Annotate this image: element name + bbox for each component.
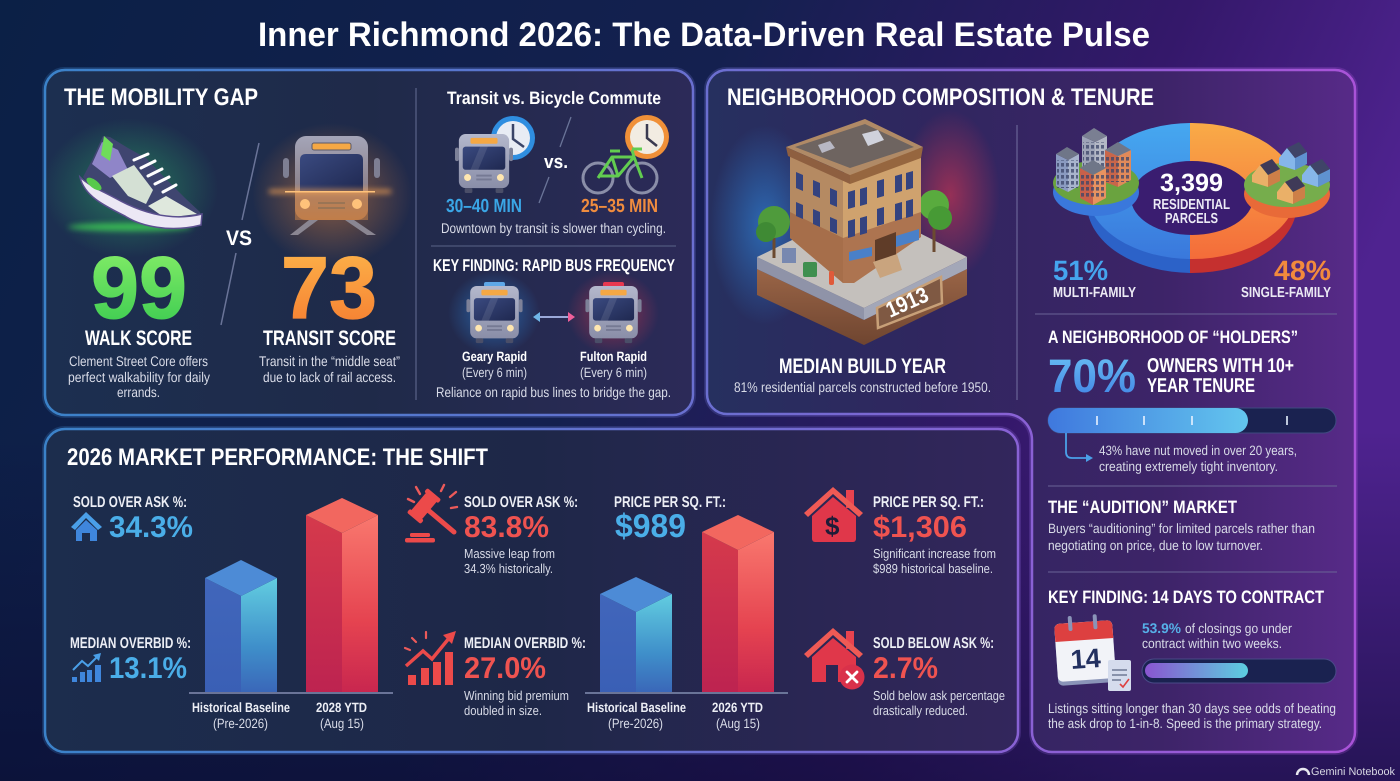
chart: parcel donut: [1053, 123, 1330, 273]
chart: sold over ask bars: (Aug 15): [320, 716, 364, 731]
stat: 2026 sold below ask: Sold below ask percentage: [873, 688, 1005, 703]
icon: isometric 1913 building: [710, 110, 1000, 345]
panel: the mobility gap: [42, 70, 693, 415]
metric: 70 percent owners: YEAR TENURE: [1147, 375, 1255, 397]
stat: baseline sold over ask: SOLD OVER ASK %:: [73, 494, 187, 511]
metric: walk score: Clement Street Core offers: [69, 353, 208, 369]
bar: 2026 ytd: [306, 498, 378, 693]
icon: blue house: [71, 512, 102, 541]
icon: geary bus: [448, 271, 540, 355]
icon: house with dollar: $: [825, 511, 840, 541]
title: Inner Richmond 2026: The Data-Driven Real Estate Pulse: [258, 16, 1150, 54]
label: median build year: MEDIAN BUILD YEAR: [779, 355, 946, 378]
metric: single-family: 48%: [1274, 255, 1331, 286]
stat: 2026 price per square foot: Significant increase from: [873, 546, 996, 561]
heading: neighborhood composition: NEIGHBORHOOD COMPOSITION & TENURE: [727, 84, 1154, 111]
metric: walk score: 99: [91, 238, 187, 337]
chart: price per square foot bars: Historical Baseline: [587, 700, 686, 715]
bar: historical baseline: [205, 560, 277, 693]
icon: fulton bus: [567, 271, 659, 355]
caption: reliance: Reliance on rapid bus lines to bridge the gap.: [436, 384, 671, 400]
caption: downtown: Downtown by transit is slower than cycling.: [441, 220, 666, 236]
metric: multi-family: MULTI-FAMILY: [1053, 285, 1136, 301]
vs divider: VS: [226, 227, 252, 250]
chart: price per square foot bars: (Aug 15): [716, 716, 760, 731]
stat: baseline median overbid: [70, 635, 191, 685]
stat: 2026 price per square foot: $1,306: [873, 511, 967, 544]
arrow: elbow to note: [1066, 433, 1093, 462]
stat: 2026 price per square foot: $989 historical baseline.: [873, 561, 993, 576]
metric: 70 percent owners: [1048, 349, 1294, 402]
icon: apartment towers on island: [1053, 128, 1139, 216]
icon: bicycle with orange clock: [583, 115, 669, 193]
vs divider: [221, 143, 259, 325]
bar: 2026 ytd: [702, 515, 774, 693]
stat: 2026 sold below ask: drastically reduced.: [873, 703, 968, 718]
label: fulton rapid: [580, 349, 647, 380]
metric: single-family: [1241, 255, 1331, 301]
label: fulton rapid: Fulton Rapid: [580, 349, 647, 364]
label: 30-40 min: 30–40 MIN: [446, 196, 522, 217]
chart: sold over ask bars: [189, 498, 393, 731]
icon: house with x badge: [804, 628, 864, 690]
metric: transit score: Transit in the “middle seat”: [259, 353, 400, 369]
stat: 2026 median overbid: [405, 631, 586, 718]
stat: 2026 median overbid: 27.0%: [464, 652, 546, 685]
stat: 2026 price per square foot: [804, 487, 996, 576]
label: median build year: [734, 355, 991, 395]
icon: blue trend chart: [72, 653, 101, 682]
chart: sold over ask bars: (Pre-2026): [213, 716, 268, 731]
vs small divider: [539, 117, 571, 203]
heading: the mobility gap: THE MOBILITY GAP: [64, 84, 258, 111]
note: not moved: creating extremely tight inventory.: [1099, 459, 1278, 474]
metric: multi-family: [1053, 255, 1136, 301]
stat: 2026 sold over ask: 83.8%: [464, 511, 549, 544]
stat: 2026 median overbid: MEDIAN OVERBID %:: [464, 635, 586, 652]
stat: 2026 median overbid: doubled in size.: [464, 703, 542, 718]
label: median build year: 81% residential parcels constructed before 1950.: [734, 379, 991, 395]
icon: train with orange glow: [252, 123, 412, 267]
chart: price per square foot bars: (Pre-2026): [608, 716, 663, 731]
metric: 70 percent owners: OWNERS WITH 10+: [1147, 355, 1294, 377]
metric: transit score: 73: [281, 238, 377, 337]
stat: baseline sold over ask: 34.3%: [109, 511, 193, 544]
metric: transit score: [259, 238, 400, 385]
heading: 14 days to contract: KEY FINDING: 14 DAYS TO CONTRACT: [1048, 587, 1324, 607]
metric: 70 percent owners: 70%: [1048, 349, 1136, 402]
panel: 2026 market performance: [45, 429, 1018, 752]
stat: 2026 sold over ask: Massive leap from: [464, 546, 555, 561]
metric: transit score: TRANSIT SCORE: [263, 327, 396, 350]
icon: red trend chart: [405, 631, 456, 685]
arrow: between buses: [533, 312, 575, 322]
metric: walk score: WALK SCORE: [85, 327, 192, 350]
note: listings sitting longer: Listings sitting longer than 30 days see odds of beating: [1048, 701, 1336, 716]
metric: walk score: [68, 238, 210, 400]
chart: sold over ask bars: 2028 YTD: [316, 700, 367, 715]
label: parcel total: [1153, 169, 1230, 227]
label: parcel total: 3,399: [1160, 169, 1223, 197]
stat: 2026 median overbid: Winning bid premium: [464, 688, 569, 703]
stat: 2026 sold below ask: 2.7%: [873, 652, 938, 685]
icon: bus small: [455, 134, 513, 193]
icon: calendar 14: [1054, 613, 1131, 691]
chart: price per square foot bars: PRICE PER SQ. FT.:: [614, 494, 726, 511]
label: geary rapid: (Every 6 min): [462, 365, 527, 380]
stat: baseline median overbid: 13.1%: [109, 652, 187, 685]
label: fulton rapid: (Every 6 min): [580, 365, 647, 380]
section: audition market: negotiating on price, due to low turnover.: [1048, 538, 1263, 553]
chart: sold over ask bars: Historical Baseline: [192, 700, 290, 715]
metric: transit score: due to lack of rail access.: [263, 369, 396, 385]
heading: transit vs bicycle: Transit vs. Bicycle Commute: [447, 88, 661, 108]
stat: 2026 sold below ask: SOLD BELOW ASK %:: [873, 635, 994, 652]
chart: price per square foot bars: [585, 494, 788, 731]
section: audition market: [1048, 497, 1315, 553]
section: audition market: THE “AUDITION” MARKET: [1048, 497, 1237, 517]
stat: 2026 sold over ask: SOLD OVER ASK %:: [464, 494, 578, 511]
metric: single-family: SINGLE-FAMILY: [1241, 285, 1331, 301]
heading: holders: A NEIGHBORHOOD OF “HOLDERS”: [1048, 327, 1298, 347]
chart: price per square foot bars: 2026 YTD: [712, 700, 763, 715]
icon: house with dollar: [804, 487, 863, 542]
note: listings sitting longer: [1048, 701, 1336, 731]
chart: price per square foot bars: $989: [615, 507, 686, 544]
note: not moved: [1099, 443, 1297, 474]
metric: walk score: perfect walkability for daily: [68, 369, 210, 385]
icon: houses on island: [1244, 142, 1330, 218]
stat: baseline median overbid: MEDIAN OVERBID %:: [70, 635, 191, 652]
plaque: 1913: 1913: [882, 282, 932, 323]
heading: rapid bus frequency: KEY FINDING: RAPID BUS FREQUENCY: [433, 256, 675, 275]
icon: gavel: [405, 485, 457, 542]
label: geary rapid: [462, 349, 527, 380]
stat: closings in two weeks: of closings go under: [1185, 621, 1292, 636]
icon: calendar 14: 14: [1070, 643, 1102, 675]
metric: multi-family: 51%: [1053, 255, 1108, 286]
progress bar: 70 percent tenure: [1048, 408, 1336, 433]
stat: 2026 sold over ask: 34.3% historically.: [464, 561, 553, 576]
progress bar: 53.9 percent: [1142, 659, 1336, 683]
stat: 2026 sold over ask: [405, 485, 578, 576]
label: geary rapid: Geary Rapid: [462, 349, 527, 364]
icon: sneaker: [42, 118, 218, 258]
stat: baseline sold over ask: [71, 494, 193, 544]
label: parcel total: PARCELS: [1165, 211, 1218, 227]
stat: 2026 price per square foot: PRICE PER SQ. FT.:: [873, 494, 984, 511]
label: parcel total: RESIDENTIAL: [1153, 197, 1230, 213]
metric: walk score: errands.: [117, 384, 160, 400]
note: listings sitting longer: the ask drop to 1-in-8. Speed is the primary strategy.: [1048, 716, 1322, 731]
section: audition market: Buyers “auditioning” for limited parcels rather than: [1048, 521, 1315, 536]
stat: 2026 sold below ask: [804, 628, 1005, 718]
heading: market performance: 2026 MARKET PERFORMANCE: THE SHIFT: [67, 444, 488, 471]
icon: blue clock: [491, 116, 535, 160]
watermark: gemini notebook: Gemini Notebook: [1311, 766, 1395, 778]
stat: closings in two weeks: [1142, 620, 1292, 651]
panel: neighborhood composition and tenure: [707, 70, 1355, 752]
note: not moved: 43% have nut moved in over 20 years,: [1099, 443, 1297, 458]
stat: closings in two weeks: contract within two weeks.: [1142, 636, 1282, 651]
vs small divider: vs.: [544, 152, 568, 173]
bar: historical baseline: [600, 577, 672, 693]
label: 25-35 min: 25–35 MIN: [581, 196, 658, 217]
stat: closings in two weeks: 53.9%: [1142, 620, 1182, 636]
